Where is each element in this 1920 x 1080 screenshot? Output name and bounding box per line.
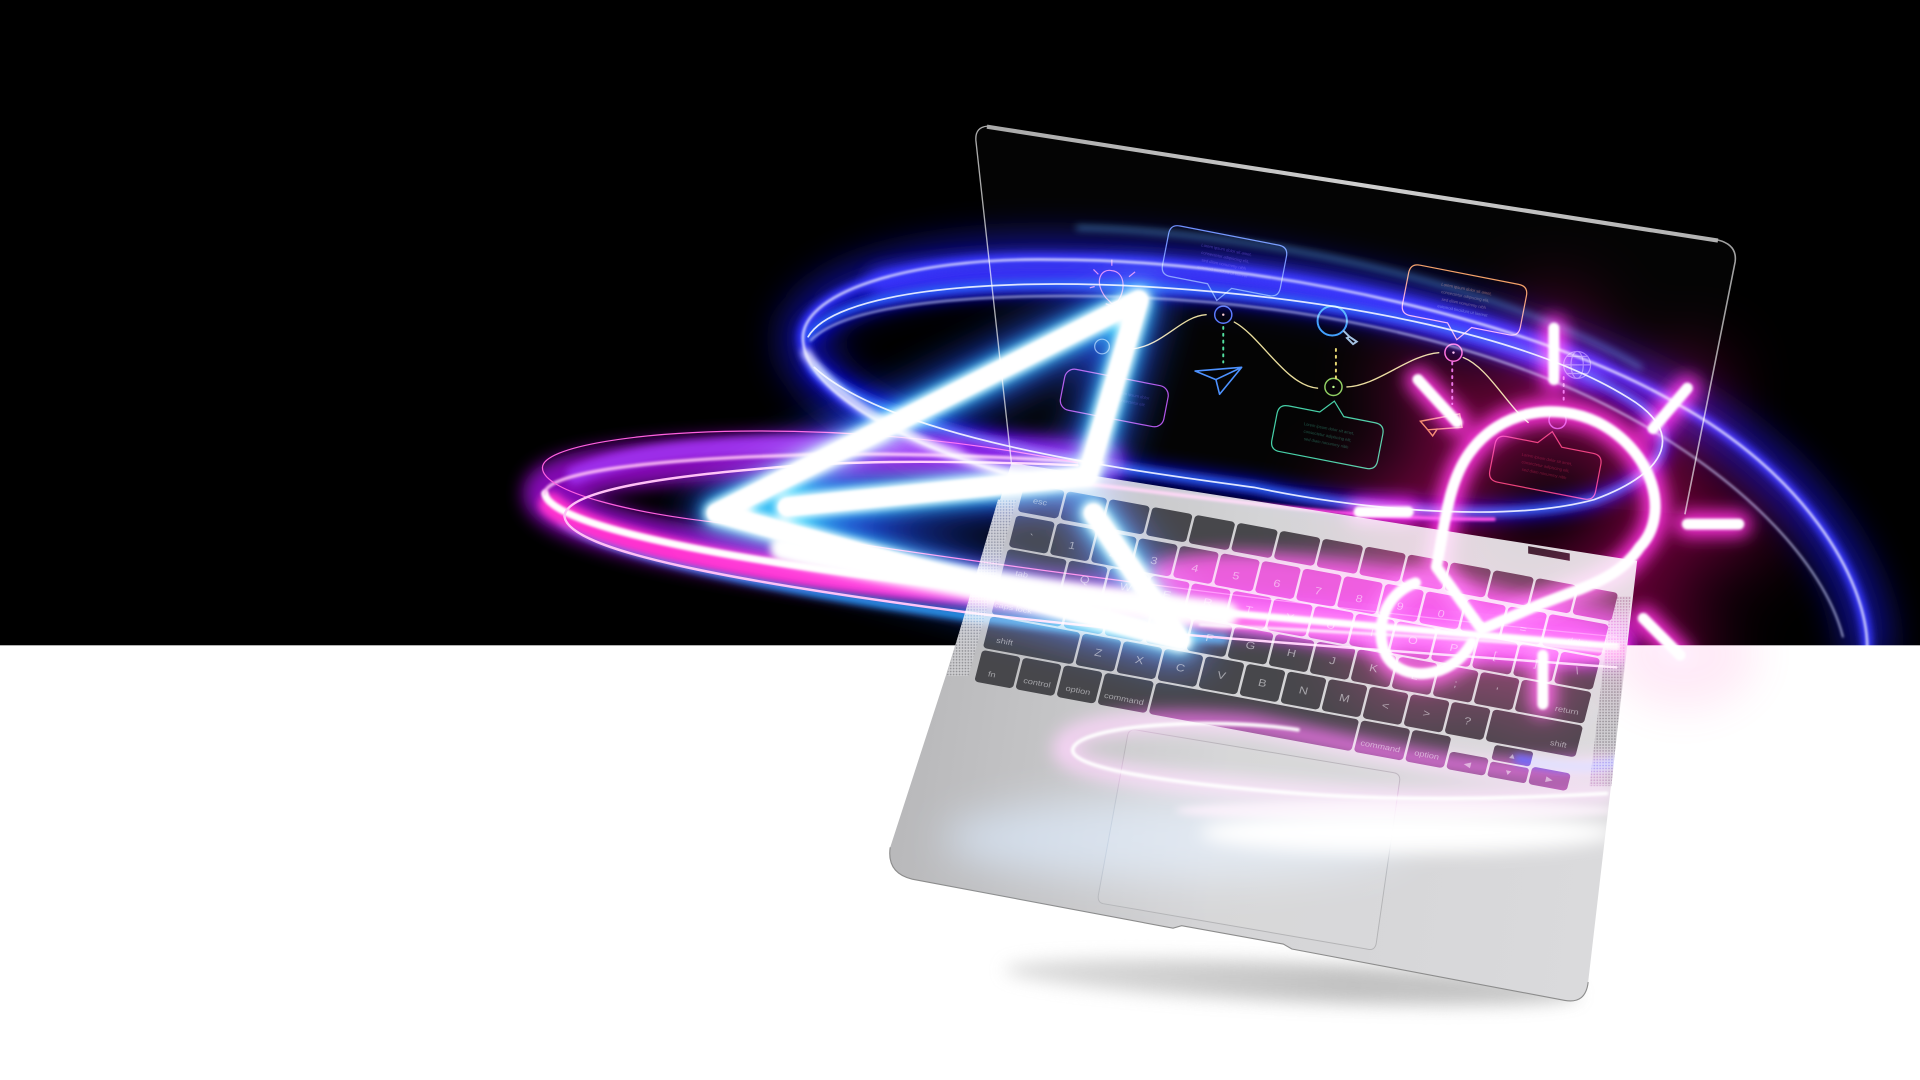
pink light orbit [542, 431, 1616, 667]
callout: blue: sed diam nonummy nibh [1201, 257, 1247, 271]
laptop shadow [1004, 950, 1580, 1014]
timeline nodes [1095, 306, 1566, 429]
top letter row [1000, 549, 1600, 690]
callout: red: Lorem ipsum dolor sit amet, [1521, 452, 1573, 466]
callout: green: consectetur adipiscing elit, [1303, 429, 1352, 443]
bulb core [1359, 328, 1739, 704]
callout: purple: Lorem ipsum dolor [1115, 389, 1150, 401]
function row [1018, 483, 1618, 621]
callout: orange: euismod tincidunt ut laoreet [1437, 303, 1489, 318]
callout: purple: consectetur elit [1117, 397, 1146, 407]
white lower background [0, 645, 1920, 1080]
bottom letter row [983, 616, 1583, 757]
right speaker grille [1589, 596, 1631, 786]
screen infographic [1059, 224, 1605, 501]
keyboard [974, 483, 1618, 791]
trackpad [1098, 730, 1400, 950]
callout: blue: euismod tincidunt ut laoreet [1197, 264, 1249, 279]
icon: megaphone [1420, 414, 1462, 436]
laptop base [890, 463, 1637, 1001]
bulb haze [1359, 328, 1739, 704]
base front edge [890, 847, 1588, 1001]
pale glow on white background [1610, 646, 1758, 713]
bulb glow [1359, 328, 1739, 704]
callout: blue: Lorem ipsum dolor sit amet, [1201, 242, 1252, 257]
black upper background [0, 0, 1920, 645]
callout: red [1488, 421, 1605, 501]
callout: red: sed diam nonummy nibh [1521, 467, 1568, 480]
icon: paper plane [1195, 367, 1242, 394]
callout: orange [1398, 263, 1528, 351]
laptop [890, 126, 1735, 1001]
white light streak on laptop base [943, 797, 1616, 880]
timeline curve [1133, 315, 1528, 422]
icon: magnifier [1318, 306, 1357, 344]
laptop lid [976, 126, 1735, 514]
icon: small lightbulb [1090, 260, 1135, 306]
hinge notch [1528, 546, 1570, 561]
callout: red: consectetur adipiscing elit, [1521, 459, 1570, 473]
left speaker grille [947, 500, 1016, 676]
number row [1009, 515, 1609, 656]
callout: blue [1158, 224, 1288, 312]
dotted connectors [1223, 327, 1564, 404]
blue light orbit [803, 228, 1867, 649]
callout: green: sed diam nonummy nibh [1304, 436, 1350, 450]
callout: orange: sed diam nonummy nibh [1441, 297, 1487, 310]
callout: blue: consectetur adipiscing elit, [1201, 250, 1250, 264]
callout: green [1270, 391, 1387, 470]
callout: orange: Lorem ipsum dolor sit amet, [1441, 282, 1492, 296]
home row [991, 583, 1592, 724]
neon paper plane [716, 300, 1180, 640]
neon lightbulb [1359, 328, 1739, 704]
modifier row [974, 650, 1575, 791]
callout: orange: consectetur adipiscing elit, [1441, 289, 1490, 303]
lower pink ring over laptop base [1063, 722, 1616, 799]
callout: green: Lorem ipsum dolor sit amet, [1303, 421, 1355, 436]
magenta glow over keyboard [1141, 529, 1635, 689]
icon: globe [1564, 351, 1591, 378]
callout: purple [1059, 367, 1170, 428]
